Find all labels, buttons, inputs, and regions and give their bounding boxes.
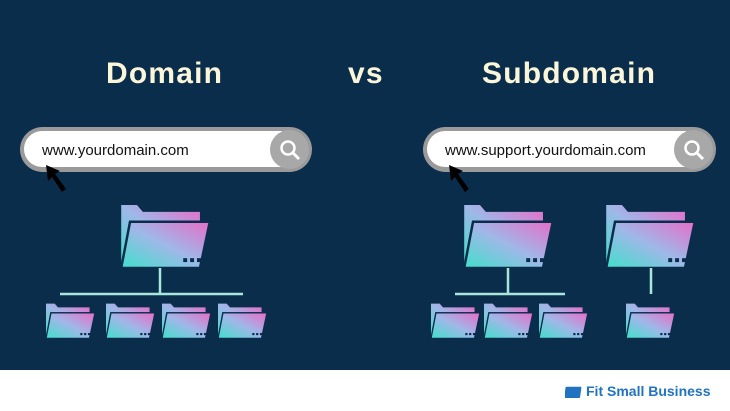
search bar: subdomain: www.support.yourdomain.com: [445, 142, 646, 159]
tree: domain folders: [46, 205, 694, 338]
footer band: [0, 370, 730, 411]
icon: cursor right: [449, 165, 469, 192]
title: vs: vs: [348, 57, 384, 90]
title: Domain: Domain: [106, 57, 223, 90]
logo: Fit Small Business: Fit Small Business: [586, 383, 710, 399]
title: Subdomain: Subdomain: [482, 57, 656, 90]
icon: cursor left: [46, 165, 66, 192]
search bar: subdomain: [423, 127, 716, 172]
search bar: domain: www.yourdomain.com: [42, 142, 189, 159]
search bar: domain: [20, 127, 312, 172]
